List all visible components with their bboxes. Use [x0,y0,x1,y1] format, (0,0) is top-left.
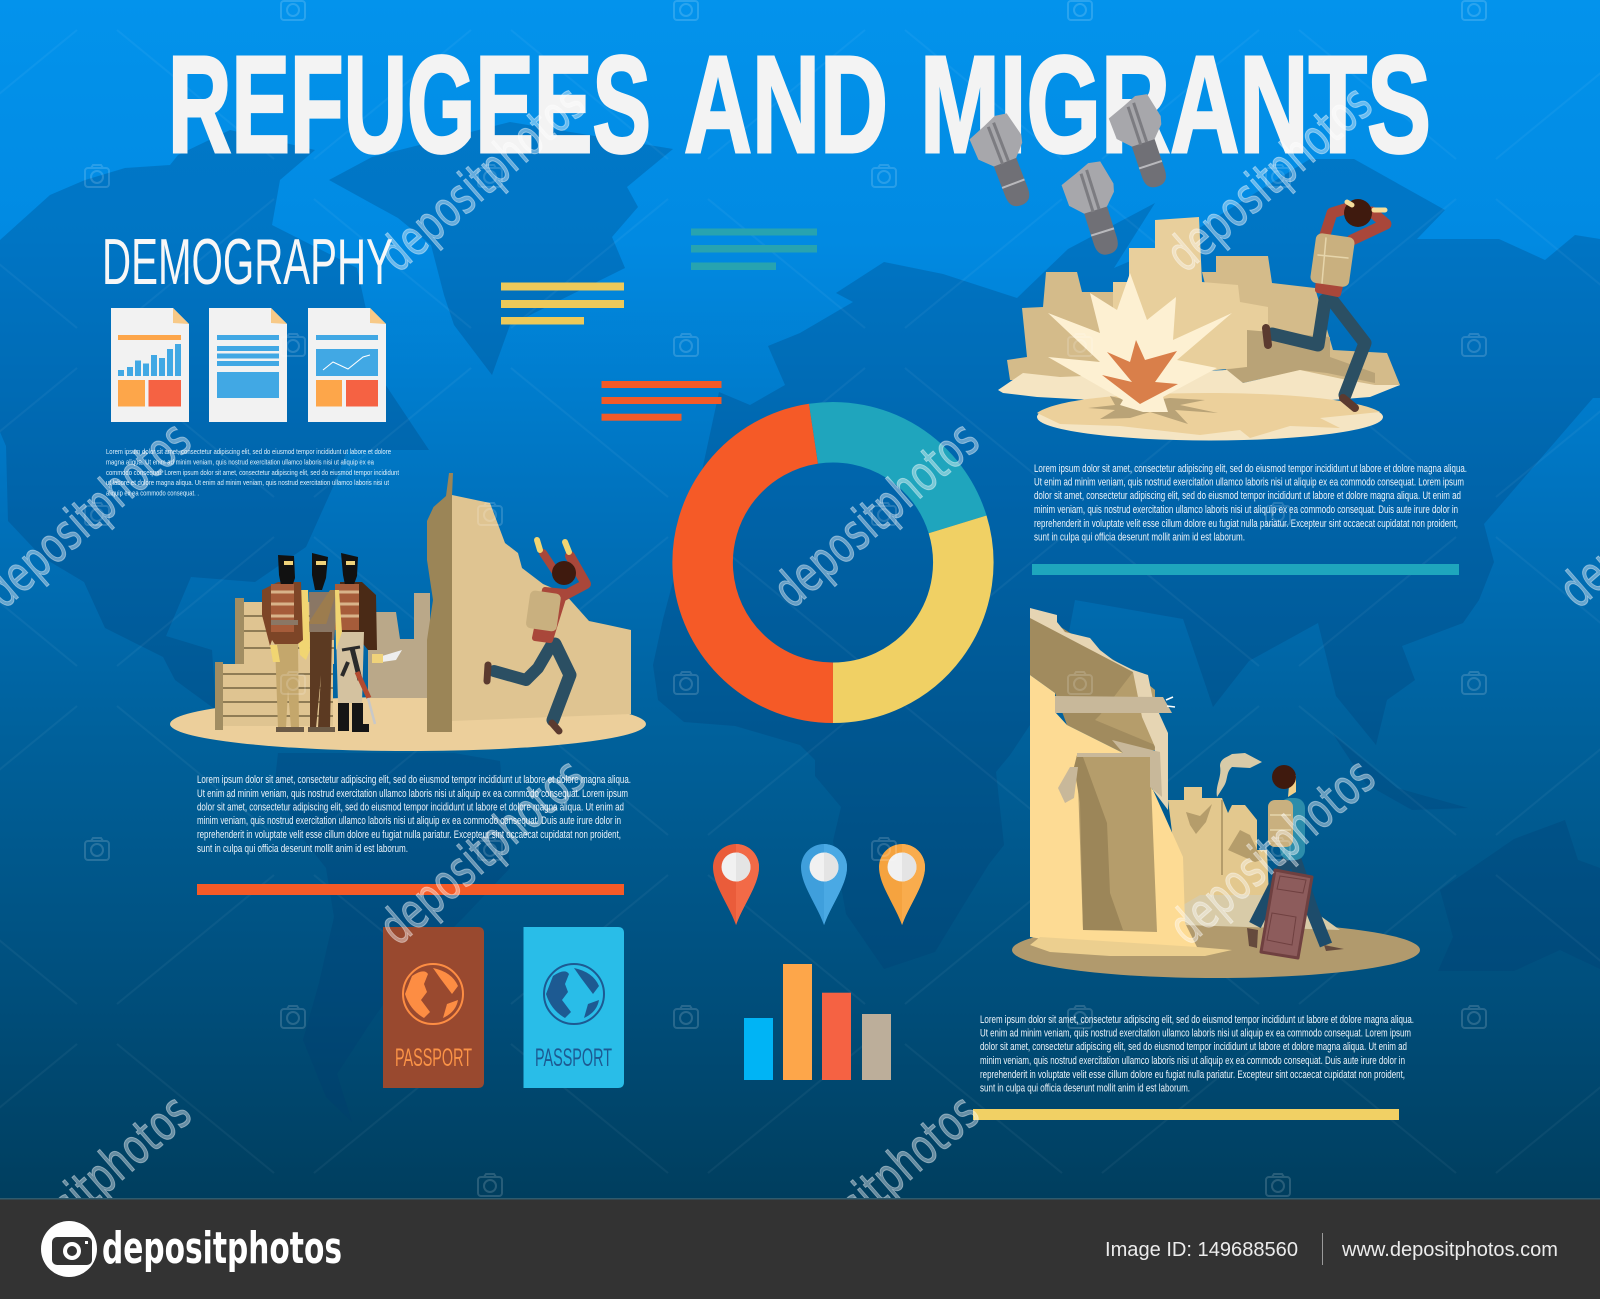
doorway [1077,755,1157,932]
map pin: red [713,844,759,925]
title: REFUGEES [168,28,651,182]
document: line chart [308,308,386,422]
running man [1266,199,1386,408]
front crate [215,662,333,730]
watermarks: depositphotos [368,747,596,956]
tall wall [452,495,631,721]
soldier left [262,555,304,732]
bar chart [744,964,891,1080]
smoke [1217,753,1262,797]
footer logo icon [41,1221,97,1277]
watermarks: depositphotos [762,410,990,619]
left text block: dolor sit amet, consectetur adipiscing elit, sed do eiusmod tempor incididunt ut labore et dolore magna aliqua. Ut enim ad [197,802,624,814]
divider: teal [1032,564,1459,575]
suitcase [1261,870,1312,958]
world map [0,122,1600,1122]
demography text: magna aliqua. Ut enim ad minim veniam, quis nostrud exercitation ullamco laboris nisi ut aliquip ex ea [106,458,375,466]
man with suitcase [1247,765,1344,958]
soldier middle [296,553,342,732]
passport: blue: PASSPORT [535,1044,612,1072]
watermarks: depositphotos [1158,747,1386,956]
back crate [235,598,334,666]
watermarks: depositphotos [1155,74,1383,283]
right bottom text block: sunt in culpa qui officia deserunt mollit anim id est laborum. [980,1082,1190,1094]
divider: yellow [973,1109,1399,1120]
title [168,28,1431,182]
documents icons [111,308,386,422]
legend bars: teal [691,228,817,270]
explosion burst [1048,273,1232,412]
rubble pile [1183,895,1340,930]
soldier right [335,553,402,732]
scene: ruined building and man with suitcase [1012,608,1420,978]
right bottom text block: dolor sit amet, consectetur adipiscing elit, sed do eiusmod tempor incididunt ut labore et dolore magna aliqua. Ut enim ad [980,1041,1407,1053]
broken beam [1055,696,1172,713]
right bottom text block: Lorem ipsum dolor sit amet, consectetur adipiscing elit, sed do eiusmod tempor incididunt ut labore et dolore magna aliqua. [980,1014,1414,1026]
footer bar [0,1198,1600,1299]
fleeing man [487,540,586,731]
bombs [965,90,1181,261]
left text block: Ut enim ad minim veniam, quis nostrud exercitation ullamco laboris nisi ut aliquip ex ea commodo consequat. Lorem ipsum [197,788,628,800]
right top text block: reprehenderit in voluptate velit esse cillum dolore eu fugiat nulla pariatur. Excepteur sint occaecat cupidatat non proident, [1034,518,1458,530]
scene: soldiers and fleeing man [170,473,646,751]
heading: demography: DEMOGRAPHY [102,225,393,298]
map pin: orange [879,844,925,925]
footer logo text: depositphotos [102,1223,342,1274]
legend bars: red [602,381,722,421]
donut chart [703,432,963,693]
tall strip [427,473,453,732]
right top text block: sunt in culpa qui officia deserunt mollit anim id est laborum. [1034,532,1245,544]
divider: red [197,884,624,895]
demography text: aliquip ex ea commodo consequat. . [106,488,199,498]
back buildings [1168,787,1270,920]
right bottom text block: reprehenderit in voluptate velit esse cillum dolore eu fugiat nulla pariatur. Excepteur sint occaecat cupidatat non proident, [980,1069,1405,1081]
knife [382,650,402,662]
watermarks: depositphotos [762,1083,990,1292]
ruin interior [1030,608,1155,753]
footer url: www.depositphotos.com [1341,1239,1558,1261]
legend bars: yellow [501,282,624,324]
rubble [998,370,1400,403]
passport: blue [524,927,624,1088]
left text block: sunt in culpa qui officia deserunt mollit anim id est laborum. [197,843,408,855]
right bottom text block: minim veniam, quis nostrud exercitation ullamco laboris nisi ut aliquip ex ea commodo consequat. Duis aute irure dolor in [980,1055,1405,1067]
crater shadow [1088,396,1218,424]
demography text: ut labore et dolore magna aliqua. Ut enim ad minim veniam, quis nostrud exercitation ullamco laboris nisi ut [106,478,390,487]
passport: brown [383,927,484,1088]
explosion core [1102,340,1178,404]
demography text: Lorem ipsum dolor sit amet, consectetur adipiscing elit, sed do eiusmod tempor incididunt ut labore et dolore [106,447,391,456]
back wall [368,593,430,698]
ruin edge [1030,608,1168,810]
left text block: minim veniam, quis nostrud exercitation ullamco laboris nisi ut aliquip ex ea commodo consequat. Duis aute irure dolor in [197,815,621,827]
title: AND [684,28,888,182]
demography text [106,447,400,498]
watermarks: depositphotos [368,74,596,283]
right bottom text block [980,1014,1414,1094]
scene: explosion [998,199,1400,440]
right top text block: minim veniam, quis nostrud exercitation ullamco laboris nisi ut aliquip ex ea commodo consequat. Duis aute irure dolor in [1034,504,1458,516]
footer image id: Image ID: 149688560 [1105,1239,1298,1261]
passport: brown: PASSPORT [395,1044,472,1072]
left text block [197,774,631,855]
map pin: blue [801,844,847,925]
document: bar chart [111,308,189,422]
rifle [342,647,375,724]
right top text block [1034,463,1467,544]
demography text: commodo consequat. Lorem ipsum dolor sit amet, consectetur adipiscing elit, sed do eiusmod tempor incididunt [106,468,400,477]
right top text block: dolor sit amet, consectetur adipiscing elit, sed do eiusmod tempor incididunt ut labore et dolore magna aliqua. Ut enim ad [1034,490,1461,502]
right bottom text block: Ut enim ad minim veniam, quis nostrud exercitation ullamco laboris nisi ut aliquip ex ea commodo consequat. Lorem ipsum [980,1028,1411,1040]
document: text [209,308,287,422]
left text block: Lorem ipsum dolor sit amet, consectetur adipiscing elit, sed do eiusmod tempor incididunt ut labore et dolore magna aliqua. [197,774,631,786]
ruin main wall [1030,675,1197,956]
ground [1037,394,1383,440]
left text block: reprehenderit in voluptate velit esse cillum dolore eu fugiat nulla pariatur. Excepteur sint occaecat cupidatat non proident, [197,829,621,841]
